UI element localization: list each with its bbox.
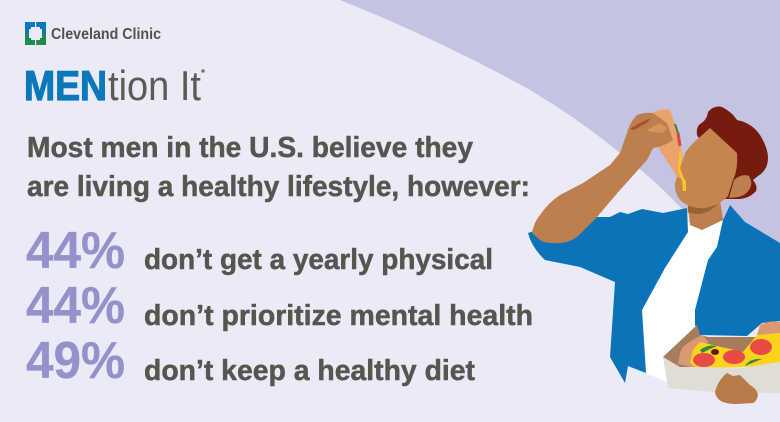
heading line one: Most men in the U.S. believe they xyxy=(27,132,473,164)
jacket right side xyxy=(695,205,780,336)
description: don’t keep a healthy diet xyxy=(144,355,475,387)
description: don’t get a yearly physical xyxy=(144,244,493,276)
crust right slice xyxy=(757,321,780,335)
percentage: 44% xyxy=(26,277,125,335)
statistic: healthy diet xyxy=(26,332,475,390)
statistic: mental health xyxy=(26,277,533,335)
pizza sauce xyxy=(678,133,680,146)
pepperoni three xyxy=(750,339,772,355)
heading line two: are living a healthy lifestyle, however: xyxy=(27,171,530,203)
purple curved background shape xyxy=(340,0,780,290)
statistic: yearly physical xyxy=(26,222,493,280)
pizza cheese xyxy=(690,330,780,368)
title bold part: MEN xyxy=(24,62,107,109)
pizza slice in hand xyxy=(653,109,685,180)
arm and hand xyxy=(532,113,673,243)
face xyxy=(675,128,737,208)
finger shadow xyxy=(630,118,651,130)
pizza crust xyxy=(678,335,708,368)
heading text block xyxy=(27,132,530,203)
pepperoni one xyxy=(693,353,715,367)
pizza box xyxy=(663,321,780,393)
white shirt xyxy=(642,220,723,390)
title light part: tion It xyxy=(108,62,201,109)
pizza toppings xyxy=(675,124,678,133)
registered mark xyxy=(201,69,205,73)
icon: Cleveland Clinic cross xyxy=(25,22,46,45)
neck xyxy=(688,200,723,230)
neck shadow xyxy=(688,201,720,214)
logo: Cleveland Clinic xyxy=(25,22,161,45)
percentage: 44% xyxy=(26,222,125,280)
melted cheese xyxy=(678,147,686,191)
percentage: 49% xyxy=(26,332,125,390)
lower hand xyxy=(715,373,758,404)
jacket left side and sleeve xyxy=(528,208,688,383)
finger highlight xyxy=(646,123,667,133)
hair xyxy=(697,107,768,199)
pepperoni two xyxy=(723,350,745,364)
ear xyxy=(729,175,751,198)
green topping two xyxy=(745,359,762,366)
title: MENtion It xyxy=(24,62,205,109)
description: don’t prioritize mental health xyxy=(144,300,533,332)
blue jacket xyxy=(528,205,780,383)
box front xyxy=(663,357,780,393)
illustration: man eating pizza xyxy=(528,107,780,404)
green topping one xyxy=(700,346,717,353)
olive xyxy=(711,349,719,355)
box inner lid xyxy=(663,325,780,368)
logo wordmark: Cleveland Clinic xyxy=(51,26,161,43)
